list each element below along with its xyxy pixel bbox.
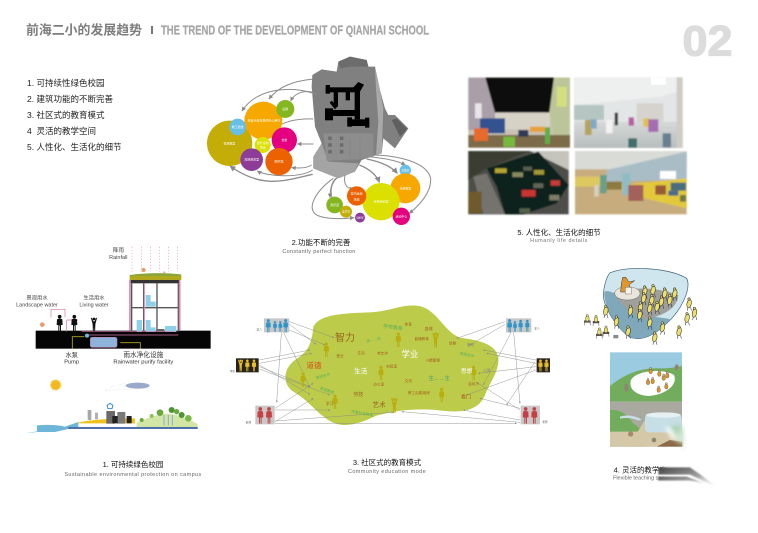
group: students right <box>537 358 550 372</box>
blob labels: green <box>315 323 475 418</box>
blob labels: small: 心理 <box>483 367 491 372</box>
panel: flexible teaching illustrations <box>584 268 718 490</box>
caption: sustainable: Sustainable environmental protection on campus <box>64 472 202 478</box>
blob labels: large: 生活 <box>354 367 368 376</box>
label: landscape water: Landscape water <box>16 303 58 309</box>
bubble: theatre <box>272 127 297 153</box>
connector lines <box>259 322 536 423</box>
label: purify facility <box>113 350 173 366</box>
caption: sustainable: 1. 可持续绿色校园 <box>103 459 163 469</box>
people and water pipes <box>40 309 178 335</box>
blob labels: large: 艺术 <box>372 400 386 409</box>
caption: details: 5. 人性化、生活化的细节 <box>517 227 601 237</box>
bubble: outdoor activity <box>255 137 271 153</box>
caption watermark smear <box>657 463 718 490</box>
blob labels: green: 家庭教育 <box>319 385 335 395</box>
label: pump: Pump <box>64 360 79 366</box>
group: teachers left: 老师 <box>246 421 251 425</box>
blob labels: small: 体育 <box>405 321 412 326</box>
group: parents right: 家人 <box>534 327 540 331</box>
panel: ecological landscape section <box>24 380 198 433</box>
caption: community <box>348 457 426 475</box>
bubble: indoor activity: 场地 <box>354 196 360 201</box>
blob labels: small: 普通教育 <box>414 336 429 341</box>
bubble: administration: 校舍行政及教师办公用房 <box>248 118 280 123</box>
blob labels: small: 身体 <box>424 325 434 332</box>
bubble: small blue: 文体室 <box>401 168 410 172</box>
blob labels: green: 生←→生 <box>429 374 451 382</box>
bubble: specialty classroom <box>390 173 420 203</box>
bubble: general teaching <box>207 121 252 166</box>
bubble: canteen: 后勤 <box>282 106 288 111</box>
group: parents left: 家人 <box>257 327 262 331</box>
blob labels: small: 爱业 <box>336 353 344 358</box>
blob labels: large <box>306 331 473 409</box>
blob labels: small: 文流 <box>405 378 412 383</box>
blob labels: small: 办公室 <box>374 381 385 386</box>
bubble: staff room <box>229 119 246 135</box>
label: living water <box>79 293 109 309</box>
green blob <box>285 306 498 425</box>
rainwater tank <box>72 334 140 349</box>
photo: stepped seating <box>468 151 569 214</box>
blob labels: green: 学校教育 <box>383 323 403 332</box>
caption: function: Constantly perfect function <box>282 249 356 255</box>
blob labels: small: 生活 <box>357 350 365 355</box>
blob labels: small: 祭教 <box>449 340 457 345</box>
bubble: small blue <box>400 165 411 176</box>
labels: rainfall: Rainfall <box>109 255 127 261</box>
white notch on photo <box>651 77 666 85</box>
photo: bright hall <box>574 77 683 148</box>
flow arrows <box>230 79 431 219</box>
page number: 02 <box>682 18 732 66</box>
bubble: common classroom <box>240 148 263 171</box>
ground slab <box>36 331 211 349</box>
bubble: art room <box>340 206 352 218</box>
icon: cloud <box>126 383 150 389</box>
caption: details: Humanly life details <box>530 238 588 244</box>
caption: flexible teaching: Flexible teaching space <box>613 476 670 482</box>
bubble: indoor activity: 室内运动 <box>351 190 363 195</box>
figures in blob <box>300 332 476 413</box>
blob labels: small: 实验室 <box>386 364 397 369</box>
bubble: canteen <box>276 100 294 118</box>
blob labels: small: 老年护 <box>377 351 388 356</box>
icon: recycle <box>107 403 113 409</box>
text block: list of trends: 2. 建筑功能的不断完善 <box>27 94 113 104</box>
caption: community: Community education mode <box>348 469 426 475</box>
bubble: staff room: 教工宿舍 <box>232 124 244 129</box>
caption: flexible teaching <box>613 464 674 482</box>
text block: list of trends: 1. 可持续性绿色校园 <box>27 78 104 88</box>
title: 前海二小的发展趋势 <box>26 22 142 38</box>
blob labels: large: 道德 <box>306 360 322 370</box>
bubble: multi-use hall <box>362 183 400 220</box>
label: purify facility: Rainwater purify facility <box>113 360 173 366</box>
city buildings <box>78 410 135 424</box>
icon: sun <box>51 380 61 390</box>
text block: list of trends: 3. 社区式的教育模式 <box>27 110 105 120</box>
blob labels: green: 托管社会教育 <box>351 409 374 418</box>
label: landscape water <box>16 293 58 309</box>
bubble: administration <box>244 102 282 140</box>
panel: rainwater section diagram <box>16 246 211 366</box>
building section <box>130 268 181 332</box>
title <box>26 22 429 38</box>
blob labels: small <box>326 321 491 406</box>
bubble: art room: 美术室 <box>342 210 350 214</box>
bubble: specialty classroom: 专用教室 <box>399 185 411 190</box>
hill with trees <box>137 407 198 427</box>
panel: community education model <box>230 306 550 425</box>
bubble: common classroom: 普通阅览室 <box>244 157 259 162</box>
bubble: music room <box>326 197 343 213</box>
ground line <box>68 427 198 429</box>
bubble: computer room <box>355 213 365 223</box>
group: parents left <box>257 318 289 332</box>
group: teachers left <box>246 406 275 425</box>
cloud outline <box>105 383 148 391</box>
blob labels: green: 家校合作 <box>315 371 331 380</box>
blob labels: small: 音乐 <box>467 342 475 347</box>
blob labels: green: 师←→生 <box>366 335 382 344</box>
caption: details <box>517 227 601 244</box>
rain lines <box>132 247 178 272</box>
group: students left: 学生 <box>230 369 235 373</box>
bubble: general teaching: 普通教室 <box>223 140 235 145</box>
labels: rainfall: 降雨 <box>113 246 124 254</box>
title: THE TREND OF THE DEVELOPMENT OF QIANHAI SCHOOL <box>161 22 429 38</box>
caption: function: 2.功能不断的完善 <box>292 237 351 247</box>
bubble: indoor activity <box>347 186 366 206</box>
bubble: computer room: 微机室 <box>356 216 364 220</box>
blob labels: large: 学业 <box>402 349 418 359</box>
building massing <box>312 57 408 178</box>
group: students left <box>230 358 259 373</box>
group: parents right <box>506 318 540 332</box>
bubble: theatre: 食堂 <box>281 137 287 142</box>
water body <box>24 422 198 433</box>
text block: list of trends: 5. 人性化、生活化的细节 <box>27 142 122 152</box>
bubble: outdoor activity: 室外运动 <box>257 140 269 145</box>
building plan footprint <box>325 82 369 128</box>
text block: list of trends: 4 灵活的教学空间 <box>27 126 96 136</box>
bubble: music room: 音乐室 <box>330 202 339 207</box>
bubble: activity centre <box>393 208 410 225</box>
blob labels: small: 小模管理 <box>425 358 440 363</box>
blob labels: small: 教工后勤用房 <box>408 390 430 395</box>
bubble: outdoor activity: 场地 <box>260 145 266 150</box>
bubble: multi-use hall: 专用活动室 <box>374 199 388 204</box>
bubble: library <box>265 148 293 175</box>
illustration: hill classroom <box>610 352 683 447</box>
blob labels: small: 活动力 <box>468 381 479 386</box>
panel: function diagram <box>207 57 431 225</box>
label: landscape water: 景观用水 <box>26 293 48 301</box>
illustration: vessel classroom <box>584 268 697 345</box>
caption: function <box>282 237 356 255</box>
text block: list of trends <box>27 78 122 152</box>
group: teachers right: 老师 <box>542 420 548 424</box>
labels: rainfall <box>109 246 127 261</box>
photo: black-box room <box>468 78 570 148</box>
caption: community: 3. 社区式的教育模式 <box>353 457 422 467</box>
label: living water: 生活用水 <box>83 293 105 301</box>
blob labels: green: 家校合作 <box>459 351 475 359</box>
caption: sustainable <box>64 459 202 478</box>
group: teachers right <box>521 406 548 424</box>
blob labels: small: 学习 <box>326 400 334 406</box>
label: pump: 水泵 <box>65 350 79 359</box>
blob labels: large: 劳技 <box>353 391 363 398</box>
label: purify facility: 雨水净化设施 <box>123 350 164 359</box>
blob labels: large: 思想 <box>461 367 473 375</box>
photo: corridor <box>575 151 687 214</box>
image watermark smear <box>665 426 687 455</box>
bubble: library: 图书馆 <box>275 159 283 164</box>
panel: interior photos <box>468 77 687 214</box>
blob labels: large: 看门 <box>461 393 471 400</box>
blob labels: large: 智力 <box>335 331 355 344</box>
label: living water: Living water <box>79 303 109 309</box>
bubble: activity centre: 活动中心 <box>395 213 407 218</box>
label: pump <box>64 350 79 366</box>
caption: flexible teaching: 4. 灵活的教学空间 <box>614 464 674 474</box>
